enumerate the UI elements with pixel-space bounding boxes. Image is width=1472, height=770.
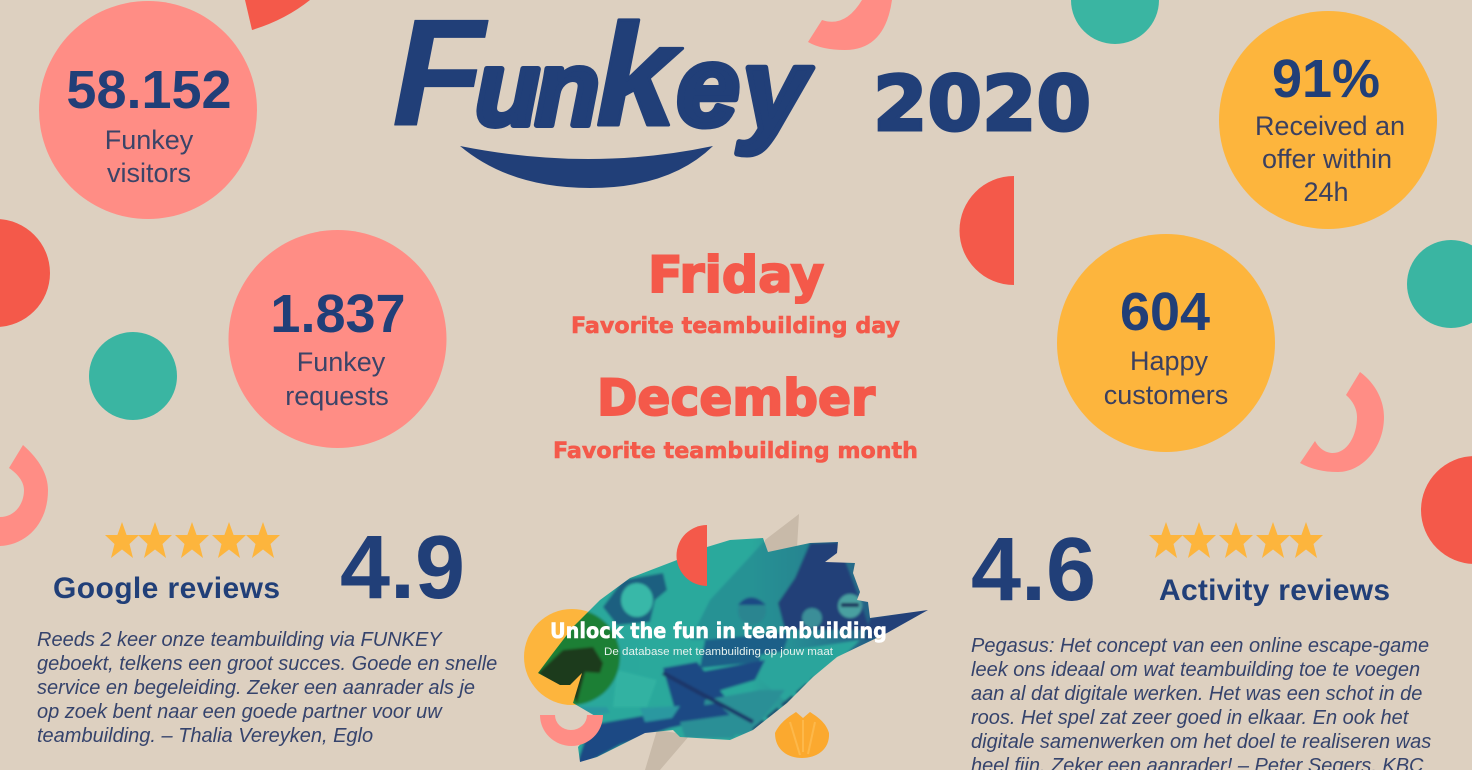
favorite day: Friday <box>648 246 824 304</box>
testimonial: Reeds 2 keer onze teambuilding via FUNKEY <box>37 629 443 651</box>
stat: 91% received an offer: 91% <box>1272 49 1380 109</box>
title year: 2020: 2020 <box>873 59 1091 148</box>
rating stars <box>105 522 280 558</box>
image title: Unlock the fun in teambuilding <box>550 619 887 643</box>
testimonial: leek ons ideaal om wat teambuilding toe te voegen <box>971 659 1420 681</box>
score: 4.6 <box>971 520 1096 620</box>
stat: 91% received an offer: offer within <box>1262 144 1392 174</box>
yellow circle <box>524 609 620 705</box>
panel: Google reviews <box>37 518 497 747</box>
stat: 604 happy customers: customers <box>1104 380 1228 410</box>
stat: 91% received an offer: Received an <box>1255 111 1405 141</box>
favorite month: Favorite teambuilding month <box>553 439 918 464</box>
testimonial <box>971 635 1431 770</box>
pink arc <box>540 715 603 746</box>
central image: Unlock the fun in teambuilding <box>520 514 930 770</box>
stat: 604 happy customers <box>1057 234 1275 452</box>
favorite month <box>553 369 918 464</box>
heading: Google reviews <box>53 572 280 605</box>
stat: 604 happy customers: Happy <box>1130 346 1209 376</box>
logo: Funkey: n <box>535 30 600 148</box>
stat: 58.152 Funkey visitors: visitors <box>107 158 191 188</box>
stat: 91% received an offer: 24h <box>1303 177 1349 207</box>
grey shard <box>645 514 799 770</box>
heading: Activity reviews <box>1159 574 1390 607</box>
testimonial: Pegasus: Het concept van een online escape-game <box>971 635 1429 657</box>
image subtitle: De database met teambuilding op jouw maat <box>604 646 833 658</box>
favorite month: December <box>597 369 875 427</box>
logo: Funkey: e <box>677 24 739 149</box>
testimonial: aan al dat digitale werken. Het was een schot in de <box>971 683 1422 705</box>
testimonial <box>37 629 497 747</box>
stat: 1.837 Funkey requests: 1.837 <box>270 284 406 344</box>
testimonial: geboekt, telkens een groot succes. Goede en snelle <box>37 653 497 675</box>
stat: 604 happy customers: 604 <box>1120 282 1210 342</box>
stat: 58.152 Funkey visitors <box>39 1 257 219</box>
overlap with yellow circle <box>538 611 622 706</box>
decorative shapes <box>0 0 1472 564</box>
stat: 91% received an offer <box>1219 11 1437 229</box>
orange tulip <box>775 712 829 758</box>
brush photo <box>538 538 928 762</box>
testimonial: teambuilding. – Thalia Vereyken, Eglo <box>37 725 373 747</box>
favorite day <box>571 246 900 339</box>
stat: 58.152 Funkey visitors: Funkey <box>105 125 194 155</box>
favorite day: Favorite teambuilding day <box>571 314 900 339</box>
logo: Funkey <box>392 0 813 188</box>
testimonial: op zoek bent naar een goede partner voor uw <box>37 701 443 723</box>
stat: 1.837 Funkey requests: Funkey <box>297 347 386 377</box>
logo: Funkey: u <box>475 30 540 148</box>
stat: 1.837 Funkey requests: requests <box>285 381 389 411</box>
stat: 1.837 Funkey requests <box>228 230 446 448</box>
testimonial: roos. Het spel zat zeer goed in elkaar. En ook het <box>971 707 1410 729</box>
red half circle <box>676 525 707 586</box>
stat: 58.152 Funkey visitors: 58.152 <box>66 60 232 120</box>
testimonial: service en begeleiding. Zeker een aanrader als je <box>37 677 475 699</box>
panel: Activity reviews <box>971 520 1431 770</box>
rating stars <box>1149 522 1323 558</box>
testimonial: digitale samenwerken om het doel te realiseren was <box>971 731 1431 753</box>
logo: Funkey: y <box>737 24 813 156</box>
score: 4.9 <box>340 518 465 618</box>
